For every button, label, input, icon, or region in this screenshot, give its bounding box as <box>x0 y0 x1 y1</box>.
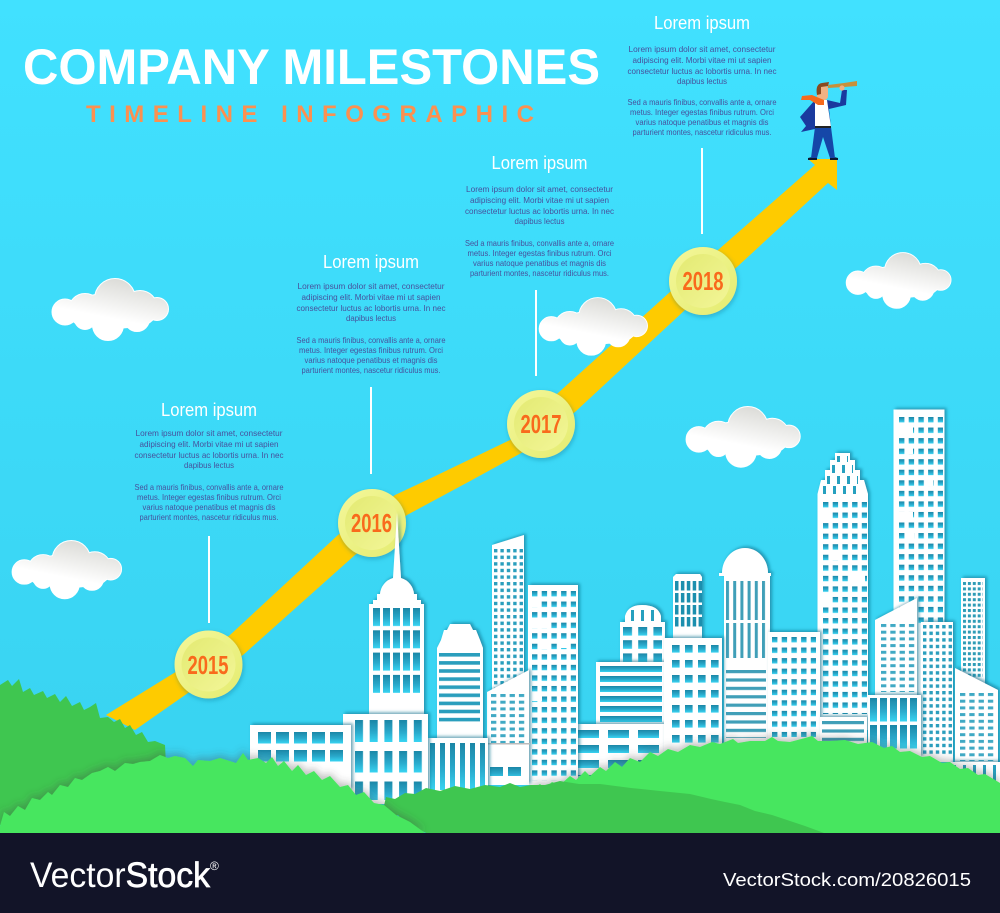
milestone text block 2015: Sed a mauris finibus, convallis ante a, ornare <box>134 482 284 492</box>
milestone text block 2018: Lorem ipsum dolor sit amet, consectetur <box>628 44 776 54</box>
milestone text block 2016: parturient montes, nascetur ridiculus mus. <box>302 365 440 375</box>
milestone marker 2018 <box>669 247 737 315</box>
milestone text block 2017: consectetur luctus ac lobortis urna. In nec <box>465 206 615 216</box>
buildings: stepped tower <box>818 453 868 730</box>
milestone text block 2017: varius natoque penatibus et magnis dis <box>473 258 606 268</box>
milestone text block 2018 <box>628 13 777 137</box>
milestone text block 2018: varius natoque penatibus et magnis dis <box>636 117 768 127</box>
milestone text block 2015: Lorem ipsum <box>161 400 257 420</box>
milestone text block 2017: dapibus lectus <box>514 216 564 226</box>
buildings: low vertical-slot block <box>868 695 921 757</box>
buildings: far right base <box>950 762 1000 792</box>
buildings: grid tower <box>528 585 578 785</box>
milestone text block 2016: metus. Integer egestas finibus rutrum. Orci <box>299 345 443 355</box>
milestone text block 2016: varius natoque penatibus et magnis dis <box>304 355 438 365</box>
title: COMPANY MILESTONES <box>23 39 600 95</box>
grass: left dark hill <box>0 679 166 825</box>
buildings: central office block <box>664 638 722 753</box>
milestone text block 2017: Lorem ipsum dolor sit amet, consectetur <box>466 184 613 194</box>
milestone marker 2016: 2016 <box>351 508 392 538</box>
milestone text block 2017 <box>465 153 615 278</box>
cloud upper right <box>847 253 951 308</box>
milestone text block 2016: Lorem ipsum dolor sit amet, consectetur <box>298 281 445 291</box>
milestone text block 2018: dapibus lectus <box>677 76 727 86</box>
cloud lower right <box>687 407 800 467</box>
milestone marker 2016 <box>338 489 406 557</box>
milestone text block 2016: Sed a mauris finibus, convallis ante a, ornare <box>296 335 446 345</box>
milestone text block 2018: Sed a mauris finibus, convallis ante a, ornare <box>628 97 777 107</box>
milestone marker 2018: 2018 <box>682 266 724 296</box>
buildings: low left block <box>250 725 351 790</box>
milestone text block 2016: dapibus lectus <box>346 313 396 323</box>
milestone text block 2015: metus. Integer egestas finibus rutrum. Orci <box>137 492 281 502</box>
connector lines <box>208 148 703 623</box>
grass: right hill <box>530 736 1000 833</box>
milestone text block 2018: Lorem ipsum <box>654 13 750 33</box>
cloud centre <box>540 298 647 355</box>
buildings: spire tower <box>369 513 424 716</box>
footer reference id: VectorStock.com/20826015 <box>723 869 971 890</box>
milestone text block 2015: adipiscing elit. Morbi vitae mi ut sapien <box>140 439 279 449</box>
footer band <box>0 833 1000 913</box>
buildings: narrow grid block <box>921 622 954 762</box>
buildings: tower base <box>343 714 428 804</box>
milestone text block 2017: Lorem ipsum <box>492 153 588 173</box>
milestone text block 2018: metus. Integer egestas finibus rutrum. Orci <box>630 107 774 117</box>
grass: middle dark hill <box>383 781 824 833</box>
buildings: slanted mid-right <box>875 598 917 700</box>
milestone text block 2017: adipiscing elit. Morbi vitae mi ut sapien <box>470 195 609 205</box>
buildings: slim right tower <box>961 578 985 708</box>
milestone text block 2015: parturient montes, nascetur ridiculus mus. <box>140 512 278 522</box>
buildings: small grid tower <box>673 574 702 640</box>
buildings: striped stepped tower <box>437 624 483 745</box>
buildings: dome tower <box>719 548 771 745</box>
growth arrow <box>106 159 837 730</box>
buildings: low block <box>578 724 668 779</box>
buildings: striped block <box>596 662 666 732</box>
milestone text block 2017: metus. Integer egestas finibus rutrum. Orci <box>468 248 612 258</box>
milestone marker 2015: 2015 <box>188 650 228 680</box>
cloud top left <box>52 279 168 340</box>
buildings: arched block <box>620 605 665 665</box>
milestone text block 2016: adipiscing elit. Morbi vitae mi ut sapien <box>302 292 441 302</box>
milestone text block 2016: Lorem ipsum <box>323 252 419 272</box>
milestone marker 2015 <box>174 630 242 698</box>
milestone text block 2018: parturient montes, nascetur ridiculus mus. <box>632 127 772 137</box>
milestone text block 2018: adipiscing elit. Morbi vitae mi ut sapien <box>632 55 772 65</box>
milestone text block 2016 <box>296 252 446 375</box>
milestone text block 2017: Sed a mauris finibus, convallis ante a, ornare <box>465 238 614 248</box>
buildings: slanted far right <box>955 668 998 765</box>
milestone text block 2015: Lorem ipsum dolor sit amet, consectetur <box>136 428 283 438</box>
milestone text block 2015: dapibus lectus <box>184 460 234 470</box>
milestone marker 2017: 2017 <box>520 409 562 439</box>
footer logo: VectorStock <box>30 856 210 895</box>
buildings: slotted base right <box>428 738 488 798</box>
grass: left light hill <box>0 753 425 833</box>
cloud left <box>13 541 121 598</box>
registered mark: ® <box>210 859 219 873</box>
milestone text block 2017: parturient montes, nascetur ridiculus mus. <box>470 268 609 278</box>
buildings: office block right of dome <box>768 632 820 742</box>
milestone text block 2015: varius natoque penatibus et magnis dis <box>142 502 276 512</box>
milestone text block 2015 <box>134 400 284 522</box>
buildings: tall tower <box>894 410 944 730</box>
milestone text block 2018: consectetur luctus ac lobortis urna. In nec <box>628 66 777 76</box>
milestone text block 2016: consectetur luctus ac lobortis urna. In nec <box>296 303 446 313</box>
milestone marker 2017 <box>507 390 575 458</box>
buildings: slanted narrow tower <box>492 535 524 700</box>
buildings: slanted front block <box>487 670 530 785</box>
businessman with telescope <box>800 81 857 160</box>
buildings: tower base <box>820 717 867 747</box>
milestone text block 2015: consectetur luctus ac lobortis urna. In nec <box>134 450 284 460</box>
subtitle: TIMELINE INFOGRAPHIC <box>86 101 534 128</box>
